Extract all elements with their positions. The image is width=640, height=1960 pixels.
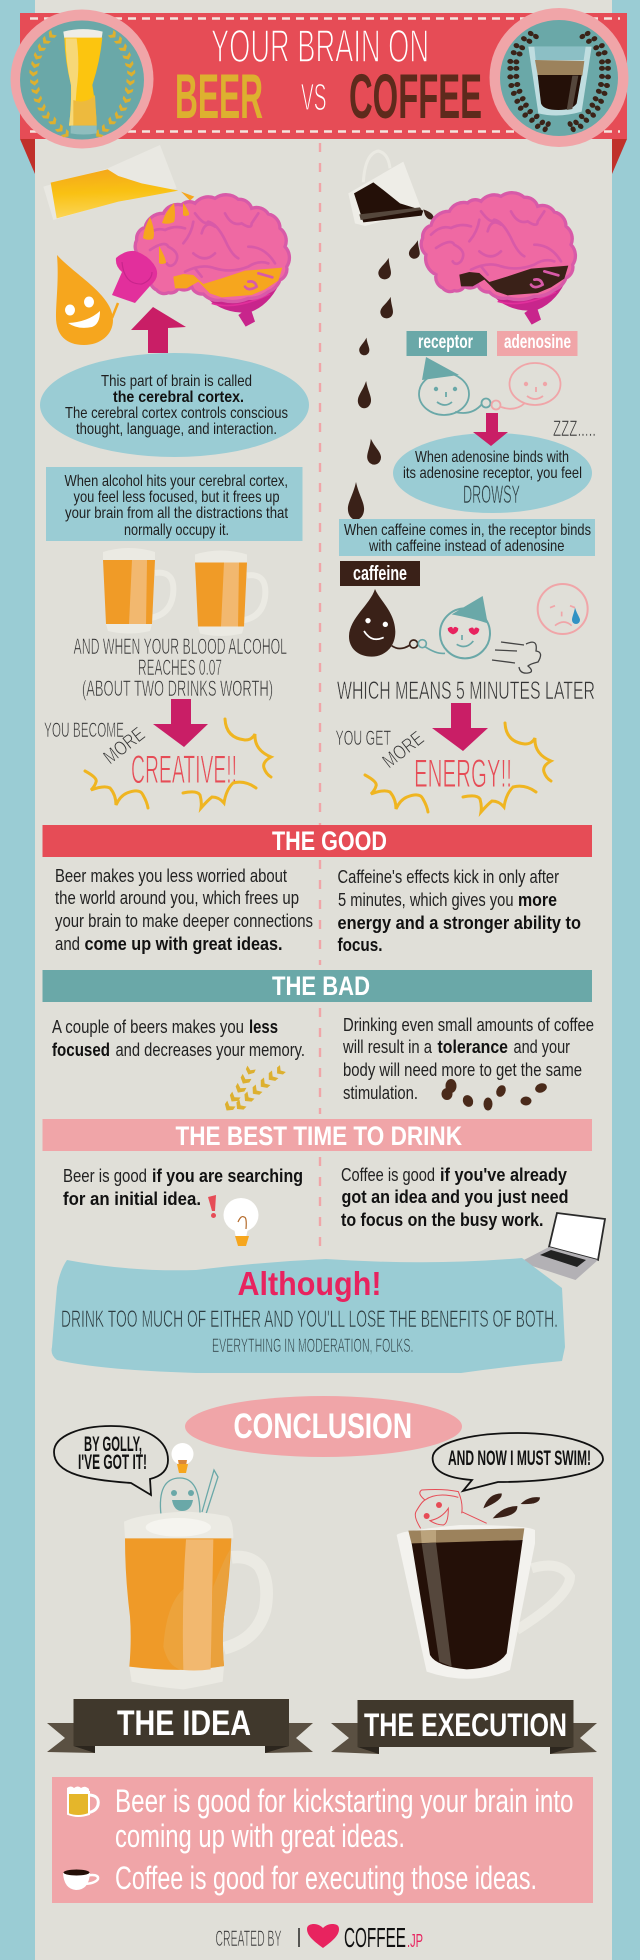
callout: drowsy: DROWSY	[463, 481, 520, 509]
beer text: if you are searching	[152, 1165, 303, 1186]
coffee text: Caffeine's effects kick in only after	[338, 866, 559, 887]
ribbon: the execution	[331, 1700, 597, 1754]
receptor in love	[418, 596, 490, 658]
wind lines	[492, 642, 541, 673]
blood alcohol text	[74, 634, 287, 701]
footer credit: I	[297, 1922, 301, 1953]
beer text: the world around you, which frees up	[55, 887, 299, 908]
section: the good	[42, 825, 592, 955]
coffee text: 5 minutes, which gives you	[338, 889, 514, 910]
beer text	[55, 865, 313, 954]
brain with beer	[135, 195, 289, 327]
footer credit: .JP	[407, 1931, 423, 1951]
text box: caffeine binds: with caffeine instead of adenosine	[368, 538, 565, 555]
arrow up	[131, 307, 186, 353]
section: the bad	[42, 970, 594, 1113]
blood alcohol text: (ABOUT TWO DRINKS WORTH)	[82, 676, 273, 701]
beer text: Beer is good	[63, 1165, 147, 1186]
beer text: come up with great ideas.	[84, 933, 282, 954]
ribbon: the idea: THE IDEA	[117, 1704, 251, 1743]
speech bubble: by golly	[54, 1426, 168, 1495]
callout: although	[52, 1258, 565, 1373]
beer text	[52, 1016, 305, 1060]
icon: heart	[307, 1924, 339, 1948]
footer credit	[216, 1922, 423, 1953]
badge: coffee glass	[490, 8, 628, 147]
receptor and adenosine faces	[419, 357, 560, 415]
icon: beer mug	[67, 1786, 98, 1816]
summary text	[115, 1783, 574, 1896]
big coffee mug	[397, 1525, 570, 1679]
title: YOUR BRAIN ON	[211, 20, 429, 72]
coffee text: more	[518, 889, 557, 910]
icon: light bulb with exclamation	[208, 1195, 258, 1246]
beer glass pouring	[43, 145, 194, 220]
summary text: coming up with great ideas.	[115, 1818, 405, 1854]
you become more creative: CREATIVE!!	[131, 748, 237, 792]
text box: alcohol effect: normally occupy it.	[124, 522, 229, 539]
coffee splashes	[483, 1493, 540, 1518]
heading bar: THE BEST TIME TO DRINK	[176, 1121, 462, 1151]
speech bubble: swim	[433, 1433, 603, 1491]
left column: beer pours on brain	[40, 145, 309, 808]
heading bar	[42, 825, 592, 857]
beer text: A couple of beers makes you	[52, 1016, 244, 1037]
coffee text	[342, 1014, 594, 1103]
speech bubble: by golly: I'VE GOT IT!	[78, 1451, 147, 1474]
text box: alcohol effect: your brain from all the distractions that	[65, 505, 288, 522]
heading bar: THE GOOD	[272, 826, 387, 856]
icon: coffee cup	[63, 1870, 98, 1890]
heading bar	[42, 1119, 592, 1151]
arrow down to callout	[473, 413, 508, 446]
you become more creative: MORE	[100, 723, 149, 769]
coffee drops	[348, 239, 423, 520]
callout: drowsy	[393, 433, 592, 513]
callout: although: EVERYTHING IN MODERATION, FOLKS.	[212, 1336, 414, 1357]
title: COFFEE	[349, 62, 482, 132]
magenta receptor plug	[112, 251, 157, 303]
coffee text: will result in a	[342, 1036, 433, 1057]
ribbon: the execution: THE EXECUTION	[364, 1707, 567, 1743]
callout: although: Although!	[238, 1265, 382, 1302]
coffee text: body will need more to get the same	[343, 1059, 582, 1080]
beer text: less	[249, 1016, 278, 1037]
adenosine pushed away	[538, 584, 588, 634]
footer credit: CREATED BY	[216, 1926, 282, 1951]
you get more energy: ENERGY!!	[414, 752, 512, 796]
arrow down	[432, 703, 488, 751]
header banner	[10, 8, 628, 174]
zzz: ZZZ.....	[553, 416, 596, 441]
you get more energy: YOU GET	[336, 727, 391, 750]
icon: idea bulb	[172, 1443, 194, 1473]
heading: conclusion	[185, 1396, 462, 1457]
section: the best time to drink	[42, 1119, 605, 1280]
callout: cerebral cortex: the cerebral cortex.	[113, 389, 244, 406]
blood alcohol text: REACHES 0.07	[138, 655, 222, 680]
coffee text: energy and a stronger ability to	[338, 912, 581, 933]
icon: laptop	[520, 1213, 605, 1280]
swimming character	[415, 1489, 487, 1528]
callout: drowsy: When adenosine binds with	[415, 449, 569, 466]
two beer mugs	[103, 548, 265, 636]
beer text: your brain to make deeper connections	[55, 910, 313, 931]
beer text	[63, 1165, 303, 1209]
you become more creative: YOU BECOME	[44, 719, 124, 742]
footer credit: COFFEE	[344, 1922, 406, 1953]
right column: coffee pours on brain	[336, 151, 596, 812]
heading bar	[42, 970, 592, 1002]
text box: alcohol effect: you feel less focused, but it frees up	[74, 489, 280, 506]
ribbon: the idea	[47, 1699, 313, 1753]
summary box	[52, 1777, 593, 1903]
coffee text: focus.	[338, 934, 382, 955]
beer drop character	[56, 255, 118, 345]
title: BEER	[175, 62, 263, 132]
coffee text: stimulation.	[343, 1082, 418, 1103]
arrow down	[153, 699, 208, 747]
beer text: and decreases your memory.	[116, 1039, 305, 1060]
coffee text: and your	[514, 1036, 570, 1057]
beer text: and	[55, 933, 80, 954]
callout: drowsy: its adenosine receptor, you feel	[403, 465, 582, 482]
big beer mug	[124, 1512, 267, 1689]
title: VS	[301, 77, 326, 119]
you become more creative	[44, 719, 271, 808]
callout: cerebral cortex	[40, 353, 309, 457]
label: receptor	[406, 331, 487, 356]
callout: cerebral cortex: The cerebral cortex controls conscious	[65, 405, 288, 422]
speech bubble: by golly: BY GOLLY,	[84, 1433, 142, 1456]
label: adenosine	[497, 331, 578, 356]
label: receptor: receptor	[418, 332, 473, 353]
beer text: for an initial idea.	[63, 1188, 201, 1209]
beer text: Beer makes you less worried about	[55, 865, 287, 886]
blood alcohol text: AND WHEN YOUR BLOOD ALCOHOL	[74, 634, 287, 659]
coffee text: Coffee is good	[341, 1164, 435, 1185]
beer drips	[143, 203, 189, 264]
you get more energy: MORE	[379, 727, 428, 773]
coffee text: got an idea and you just need	[342, 1186, 568, 1207]
coffee text: tolerance	[438, 1036, 508, 1057]
coffee text	[341, 1164, 568, 1230]
caffeine drop character	[349, 589, 418, 657]
badge: beer glass	[10, 10, 154, 148]
brain with coffee	[421, 193, 575, 325]
label: caffeine: caffeine	[353, 563, 407, 585]
beer text: focused	[52, 1039, 110, 1060]
coffee text: if you've already	[440, 1164, 568, 1185]
coffee text: to focus on the busy work.	[341, 1209, 544, 1230]
heading bar: THE BAD	[272, 971, 370, 1001]
coffee text	[338, 866, 581, 955]
heading: conclusion: CONCLUSION	[234, 1407, 412, 1446]
title	[175, 20, 482, 132]
coffee cup pouring	[348, 151, 447, 236]
icon: coffee beans	[442, 1079, 548, 1110]
callout: cerebral cortex: This part of brain is called	[101, 373, 252, 390]
label: caffeine	[340, 561, 420, 586]
label: adenosine: adenosine	[504, 332, 571, 353]
icon: wheat	[222, 1065, 286, 1113]
text box: alcohol effect	[46, 467, 302, 541]
ghost character	[160, 1470, 218, 1515]
you get more energy	[336, 723, 551, 812]
callout: cerebral cortex: thought, language, and interaction.	[76, 421, 277, 438]
text box: caffeine binds	[339, 519, 595, 556]
text box: alcohol effect: When alcohol hits your cerebral cortex,	[64, 473, 288, 490]
